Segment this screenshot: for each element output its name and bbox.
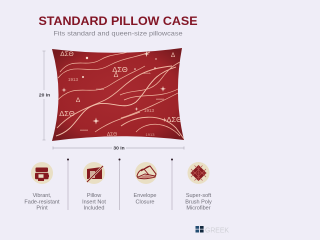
divider lines — [67, 158, 173, 210]
pillow pattern: ▵▵▵▵ — [156, 96, 164, 101]
icon: no insert — [83, 162, 105, 184]
label: vibrant print: Vibrant, — [33, 193, 52, 199]
pillow pattern: ▵▵▵▵ — [143, 71, 151, 75]
pillow pattern: Δ — [76, 97, 81, 104]
pillow pattern: Δ — [114, 72, 119, 79]
pillow pattern: Δ — [171, 53, 175, 59]
icon: microfiber — [188, 162, 210, 184]
pillow pattern: ▵▵▵▵ — [80, 127, 88, 132]
background — [0, 0, 239, 239]
subtitle: Fits standard and queen-size pillowcase — [54, 30, 183, 38]
label: microfiber: Super-soft — [186, 193, 212, 199]
label: no insert: Insert Not — [82, 199, 106, 205]
pillow pattern: ▵▵▵▵ — [96, 86, 104, 91]
label: no insert: Pillow — [87, 193, 101, 199]
pillow pattern: 1913 — [146, 132, 155, 137]
width dimension: 30 in — [113, 146, 125, 152]
pillow pattern: 1913 — [68, 77, 79, 82]
pillow pattern — [56, 51, 184, 139]
icon: envelope closure — [135, 162, 157, 184]
logo — [196, 226, 229, 235]
label: microfiber: Brush Poly — [185, 199, 212, 205]
label: envelope closure: Closure — [136, 199, 154, 205]
pillow pattern: ΔΣΘ — [59, 109, 75, 118]
label: microfiber: Microfiber — [186, 206, 211, 212]
label: envelope closure: Envelope — [134, 193, 156, 199]
icon: vibrant print — [31, 162, 53, 184]
title: STANDARD PILLOW CASE — [38, 15, 198, 28]
logo: GREEK — [205, 228, 229, 235]
label: vibrant print: Print — [36, 206, 48, 212]
pillow — [52, 48, 184, 141]
pillow pattern: ΔΣΘ — [112, 65, 128, 74]
label: no insert: Included — [84, 206, 104, 212]
width dimension — [53, 144, 184, 152]
pillow pattern: +ΔΣΘ — [162, 115, 182, 124]
height dimension: 20 in — [39, 93, 50, 99]
pillow pattern: 1913 — [144, 108, 155, 113]
height dimension — [38, 51, 51, 140]
label: vibrant print: Fade-resistant — [24, 199, 60, 205]
pillow pattern: ΔΣΘ — [107, 132, 117, 138]
greek letters: ΔΣΘ — [60, 51, 74, 58]
